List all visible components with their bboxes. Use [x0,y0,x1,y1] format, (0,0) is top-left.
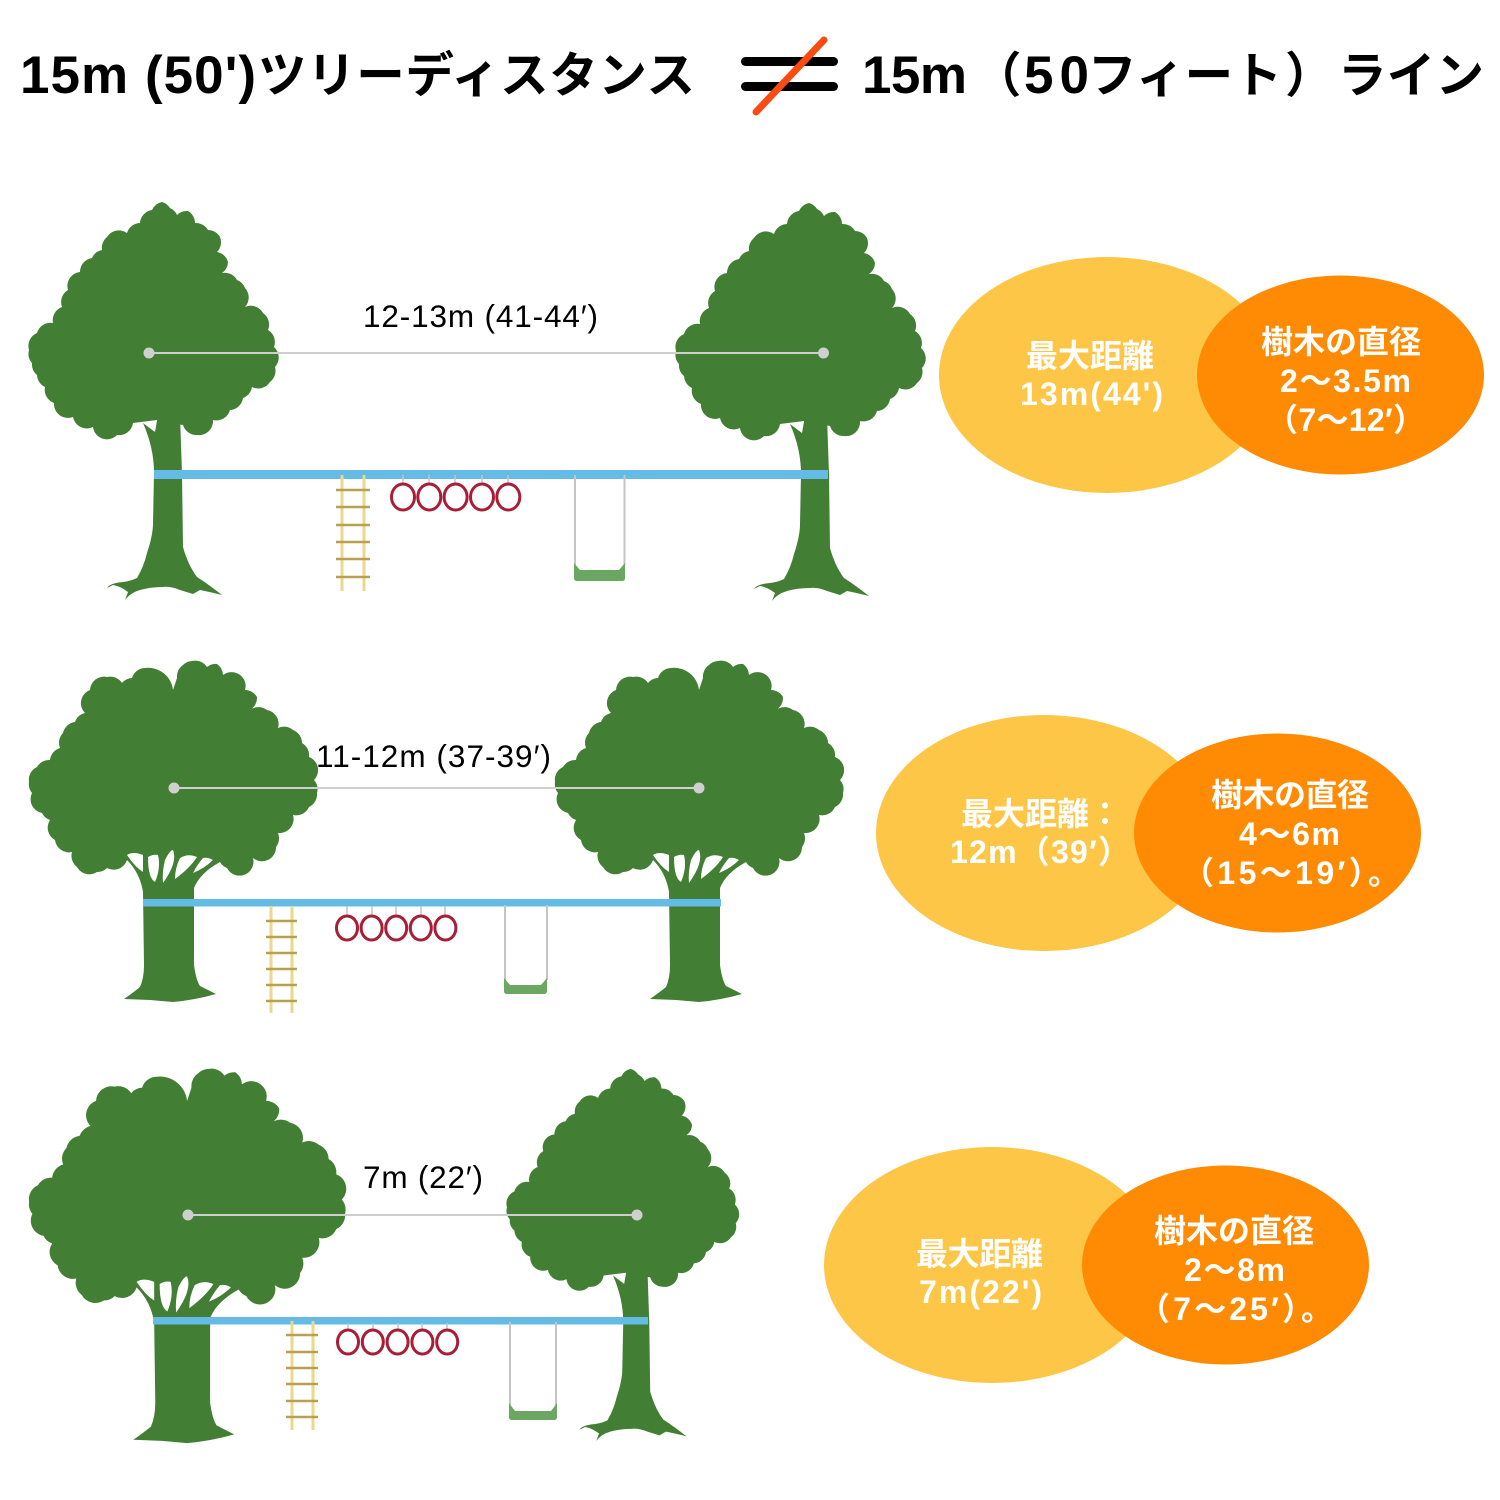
panel: row 2 [29,661,1421,1013]
bubble: max distance row 2: 12m（39′） [950,834,1130,870]
bubble: trunk diameter row 1: （7〜12′） [1266,402,1425,438]
bubble: max distance row 2 [876,715,1212,951]
bubble: trunk diameter row 2 [1134,734,1421,932]
ladder row 3 [286,1321,318,1430]
title: 15m (50 feet) line [862,46,1484,105]
bubble: trunk diameter row 3 [1082,1166,1369,1364]
bubble: trunk diameter row 1: 樹木の直径 [1261,324,1421,360]
bubble: max distance row 2: 最大距離： [961,796,1121,832]
title: 15m (50 feet) line: ライン [1338,49,1484,103]
bubble: trunk diameter row 1: 2〜3.5m [1280,363,1411,399]
bubble: trunk diameter row 2: （15〜19′）。 [1182,855,1400,891]
slackline row 2 [143,899,721,906]
panel: row 3 [29,1069,1369,1443]
title: 15m (50') tree distance: ツリーディスタンス [258,49,695,103]
title: 15m (50') tree distance [20,46,695,105]
title: 15m (50') tree distance: 15m (50') [20,46,256,105]
ladder row 2 [266,906,297,1013]
bubble: max distance row 3 [824,1147,1160,1383]
slackline row 3 [153,1317,648,1324]
bubble: max distance row 1: 13m(44') [1020,376,1163,412]
bubble: max distance row 3: 7m(22') [919,1274,1042,1310]
swing row 1 [574,475,625,581]
title: 15m (50 feet) line: ） [1285,49,1334,103]
icon: not-equal sign [741,40,838,112]
rings row 2 [336,906,456,940]
swing row 2 [504,905,547,994]
tree: right, row 1 [675,203,926,601]
title: 15m (50 feet) line: （ [973,49,1022,103]
tree: left, row 3 [29,1069,346,1443]
tree: right, row 3 [506,1069,739,1441]
distance line row 2 [168,782,704,794]
title: 15m (50 feet) line: 50 [1024,46,1089,105]
tree: left, row 2 [29,661,318,1002]
ladder row 1 [336,475,370,591]
distance label row 1: 12-13m (41-44′) [363,298,598,334]
swing row 3 [509,1322,557,1420]
bubble: max distance row 1: 最大距離 [1026,338,1154,374]
bubble: trunk diameter row 3: 樹木の直径 [1154,1213,1314,1249]
bubble: trunk diameter row 3: 2〜8m [1184,1252,1285,1288]
distance line row 1 [144,348,829,358]
bubble: trunk diameter row 2: 4〜6m [1239,816,1340,852]
bubble: trunk diameter row 2: 樹木の直径 [1211,777,1369,813]
slackline row 1 [154,470,828,479]
title: 15m (50 feet) line: フィート [1088,49,1282,103]
rings row 3 [338,1323,458,1354]
title: 15m (50 feet) line: 15m [862,46,967,105]
distance label row 3: 7m (22′) [363,1159,483,1195]
distance label row 2: 11-12m (37-39′) [316,738,551,774]
tree: left, row 1 [28,202,279,600]
bubble: trunk diameter row 1 [1197,276,1484,474]
bubble: trunk diameter row 3: （7〜25′）。 [1138,1291,1333,1327]
distance line row 3 [182,1210,642,1220]
rings row 1 [392,475,520,510]
bubble: max distance row 1 [939,257,1275,493]
tree: right, row 2 [555,661,844,1002]
bubble: max distance row 3: 最大距離 [916,1236,1043,1272]
panel: row 1 [28,202,1484,601]
